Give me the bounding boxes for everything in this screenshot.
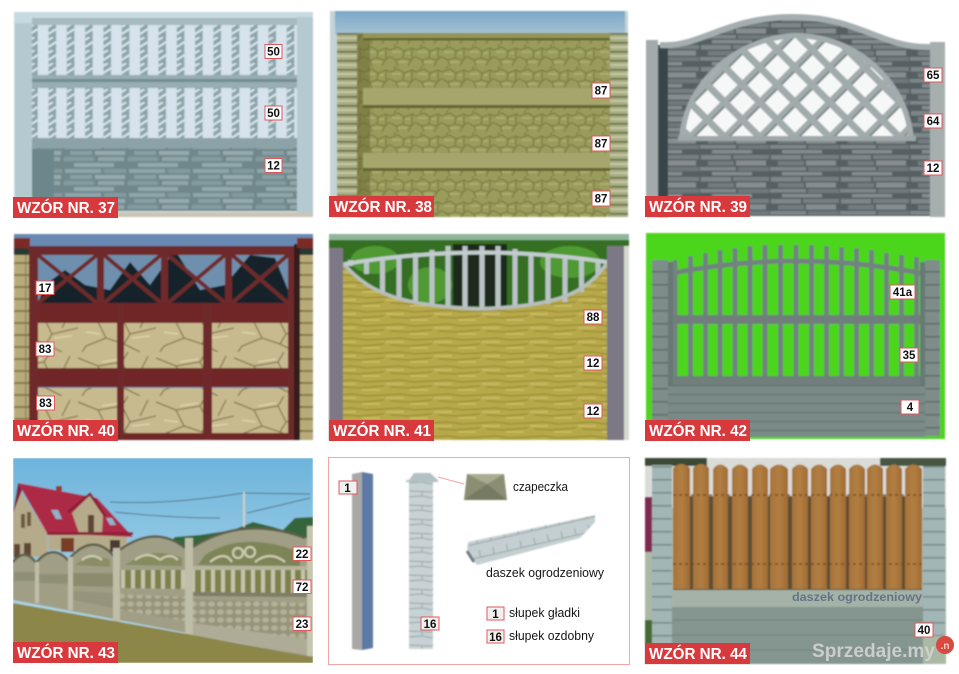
label 43: WZÓR NR. 43 xyxy=(17,644,115,662)
label 41: WZÓR NR. 41 xyxy=(333,422,431,440)
label 44: WZÓR NR. 44 xyxy=(649,645,747,663)
ghost caption: daszek ogrodzeniowy xyxy=(792,592,923,604)
panel: WZÓR NR. 39 xyxy=(645,15,945,217)
legend badge 16: 16 xyxy=(489,632,502,644)
fence photo 44 xyxy=(645,458,946,664)
badge 87 bottom: 87 xyxy=(595,194,607,206)
badge 12 upper xyxy=(584,356,602,370)
legend badge 16 xyxy=(487,630,504,644)
fence photo 38 xyxy=(330,11,628,217)
panel: WZÓR NR. 40 xyxy=(13,234,313,441)
watermark: .n xyxy=(941,641,949,652)
panel: posts and accessories xyxy=(328,458,630,664)
badge 35: 35 xyxy=(903,350,916,362)
badge 88: 88 xyxy=(587,312,600,324)
panel: WZÓR NR. 38 xyxy=(329,11,628,217)
badge 12 lower: 12 xyxy=(587,406,599,418)
badge 12: 12 xyxy=(267,160,280,172)
badge 83 top xyxy=(36,342,54,356)
badge 1 xyxy=(339,481,357,495)
badge 50 lower: 50 xyxy=(267,108,280,120)
text: czapeczka: czapeczka xyxy=(513,480,568,494)
badge 87 top: 87 xyxy=(595,86,607,98)
badge 83 lower: 83 xyxy=(39,398,52,410)
fence photo 41 xyxy=(329,234,629,440)
watermark xyxy=(812,636,954,662)
panel: WZÓR NR. 41 xyxy=(329,234,629,441)
badge 72 xyxy=(293,580,311,594)
label 38: WZÓR NR. 38 xyxy=(334,198,432,216)
badge 23: 23 xyxy=(296,619,308,631)
badge 64: 64 xyxy=(927,116,940,128)
fence photo 37 xyxy=(14,12,313,217)
badge 17: 17 xyxy=(39,283,51,295)
legend badge 1: 1 xyxy=(492,609,499,621)
label 39: WZÓR NR. 39 xyxy=(649,198,747,216)
legend text: słupek gładki: słupek gładki xyxy=(509,606,580,620)
badge 17 xyxy=(36,281,54,295)
text: daszek ogrodzeniowy: daszek ogrodzeniowy xyxy=(486,566,605,580)
panel: WZÓR NR. 42 xyxy=(645,233,945,441)
badge 12 xyxy=(924,161,942,175)
fence photo 42 xyxy=(646,233,945,439)
panel: WZÓR NR. 37 xyxy=(13,12,313,218)
smooth post xyxy=(352,472,373,650)
badge 87 middle: 87 xyxy=(595,138,607,150)
badge 1: 1 xyxy=(344,483,351,495)
decorative post with cap xyxy=(406,473,438,649)
badge 12: 12 xyxy=(927,163,939,175)
badge 16: 16 xyxy=(424,619,436,631)
badge 83 lower xyxy=(36,396,54,410)
legend badge 1 xyxy=(487,607,504,621)
badge 22 xyxy=(293,547,311,561)
badge 83 top: 83 xyxy=(39,344,51,356)
label 42: WZÓR NR. 42 xyxy=(649,422,747,440)
badge 87 middle xyxy=(592,136,610,151)
badge 12 lower xyxy=(584,404,602,418)
legend text: słupek ozdobny: słupek ozdobny xyxy=(509,629,595,643)
badge 40: 40 xyxy=(918,625,930,637)
badge 22: 22 xyxy=(296,549,308,561)
badge 41a: 41a xyxy=(893,287,913,299)
badge 23 xyxy=(293,617,311,631)
badge 12 xyxy=(265,158,282,172)
roof coping image xyxy=(467,515,595,565)
panel: WZÓR NR. 43 xyxy=(13,458,313,663)
badge 35 xyxy=(900,348,918,362)
cap image xyxy=(464,474,507,500)
badge 50 top xyxy=(265,44,282,58)
fence photo 40 xyxy=(14,234,313,440)
badge 4: 4 xyxy=(907,402,914,414)
badge 72: 72 xyxy=(296,582,308,594)
badge 50 lower xyxy=(265,106,282,120)
badge 65: 65 xyxy=(927,70,940,82)
badge 4 xyxy=(901,400,919,414)
fence photo 39 xyxy=(646,15,945,217)
badge 88 xyxy=(584,310,602,324)
label 37: WZÓR NR. 37 xyxy=(17,199,115,217)
panel: WZÓR NR. 44 xyxy=(645,458,954,664)
badge 64 xyxy=(924,114,942,128)
connector line xyxy=(438,477,464,484)
badge 87 bottom xyxy=(592,191,610,206)
fence photo 43 xyxy=(13,458,313,663)
label 40: WZÓR NR. 40 xyxy=(17,422,115,440)
watermark: Sprzedaje.my xyxy=(812,641,935,662)
badge 12 upper: 12 xyxy=(587,358,599,370)
badge 41a xyxy=(890,285,915,299)
badge 65 xyxy=(924,68,942,82)
badge 16 xyxy=(421,617,439,631)
badge 50 top: 50 xyxy=(267,46,280,58)
badge 87 top xyxy=(592,83,610,98)
badge 40 xyxy=(915,623,933,637)
